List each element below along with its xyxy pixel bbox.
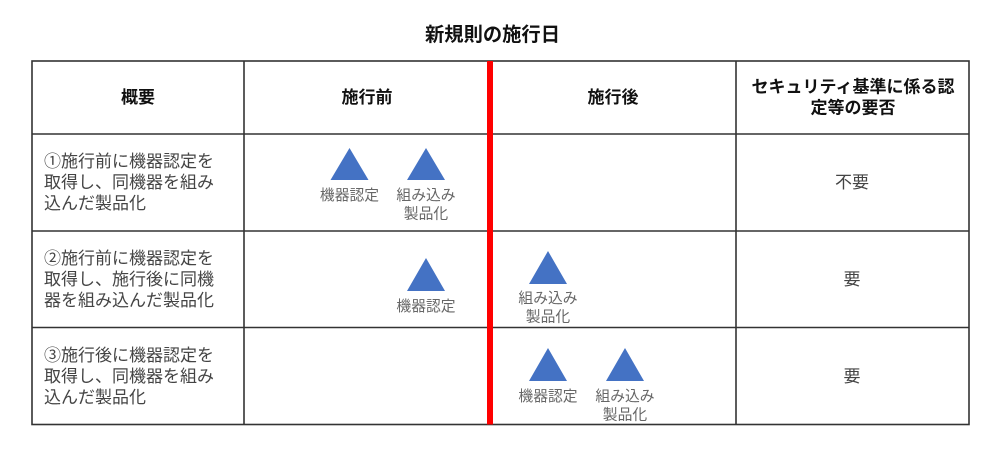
result: not required: 不要 xyxy=(835,173,869,192)
row 1 xyxy=(44,148,869,222)
header: certification requirement: セキュリティ基準に係る認 xyxy=(752,78,954,96)
label: embedded product: 組み込み xyxy=(518,291,578,307)
title: 新規則の施行日 xyxy=(425,24,560,46)
red divider: enforcement date xyxy=(487,61,493,424)
triangle: device certification xyxy=(529,348,567,381)
header: certification requirement: 定等の要否 xyxy=(810,98,896,118)
row 3 description: 込んだ製品化 xyxy=(44,388,146,407)
row 1 description: ①施行前に機器認定を xyxy=(44,152,214,171)
row 2 description: 取得し、施行後に同機 xyxy=(44,270,214,289)
result: required: 要 xyxy=(844,270,860,289)
header row xyxy=(121,76,954,118)
row 1 description: 込んだ製品化 xyxy=(44,194,146,213)
row 3 description: ③施行後に機器認定を xyxy=(44,346,214,365)
triangle: device certification xyxy=(407,258,445,291)
row 1 description: 取得し、同機器を組み xyxy=(44,173,214,192)
label: embedded product: 製品化 xyxy=(526,308,570,326)
label: device certification: 機器認定 xyxy=(518,388,578,405)
header: after enforcement: 施行後 xyxy=(588,87,638,107)
triangle: embedded product xyxy=(529,251,567,284)
label: device certification: 機器認定 xyxy=(396,298,456,315)
header: overview: 概要 xyxy=(121,88,155,107)
label: embedded product: 組み込み xyxy=(396,188,456,204)
triangle: device certification xyxy=(330,148,368,180)
row 2 description: 器を組み込んだ製品化 xyxy=(44,291,214,310)
row 2 description: ②施行前に機器認定を xyxy=(44,249,214,268)
table grid xyxy=(32,61,969,424)
row 3 description: 取得し、同機器を組み xyxy=(44,367,214,386)
label: embedded product: 製品化 xyxy=(404,206,448,222)
row 2 xyxy=(44,249,860,326)
triangle: embedded product xyxy=(606,348,644,381)
triangle: embedded product xyxy=(407,148,445,180)
label: embedded product: 製品化 xyxy=(603,406,647,424)
result: required: 要 xyxy=(844,367,860,386)
row 3 xyxy=(44,346,860,424)
label: device certification: 機器認定 xyxy=(320,187,379,204)
header: before enforcement: 施行前 xyxy=(342,88,392,107)
label: embedded product: 組み込み xyxy=(595,389,655,405)
